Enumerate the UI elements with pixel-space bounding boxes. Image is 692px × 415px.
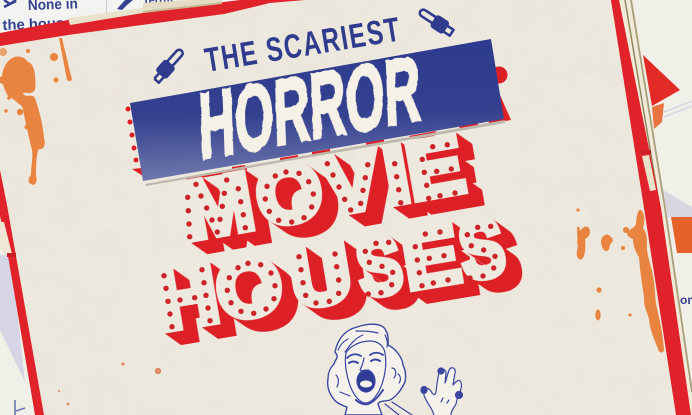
chainsaw icon right bbox=[417, 7, 455, 37]
right poster edge bbox=[611, 0, 692, 415]
red remnants behind banner bbox=[126, 66, 511, 180]
heading: houses bbox=[150, 200, 511, 348]
orange block on right sheet bbox=[671, 217, 692, 253]
screaming woman illustration bbox=[328, 324, 462, 415]
blood splatter: right bbox=[576, 208, 664, 353]
banner shadow bbox=[145, 120, 505, 186]
heading: the scariest: THE SCARIEST bbox=[202, 11, 402, 80]
heading: houses: HOU bbox=[150, 225, 358, 348]
marquee dots: houses bbox=[161, 224, 498, 329]
right arrow on back sheet bbox=[643, 55, 692, 129]
small splatter dots bbox=[58, 362, 161, 405]
top poster edge bbox=[0, 0, 305, 46]
heading: houses: S bbox=[453, 200, 511, 297]
chainsaw icon left bbox=[151, 47, 186, 84]
top-left sheet text bbox=[2, 0, 174, 34]
heading: houses: S bbox=[350, 217, 408, 314]
marquee dots: movie bbox=[185, 142, 458, 239]
heading: houses: E bbox=[396, 207, 466, 307]
blue banner bbox=[130, 39, 504, 181]
heading: horror: HORROR bbox=[197, 36, 422, 179]
left poster edge bbox=[0, 170, 44, 415]
heading: movie: MOVIE bbox=[175, 118, 471, 257]
blood splatter: top left bbox=[0, 38, 72, 185]
top-left sheet text: the house. bbox=[2, 15, 77, 34]
small sheet icons bbox=[4, 0, 133, 15]
